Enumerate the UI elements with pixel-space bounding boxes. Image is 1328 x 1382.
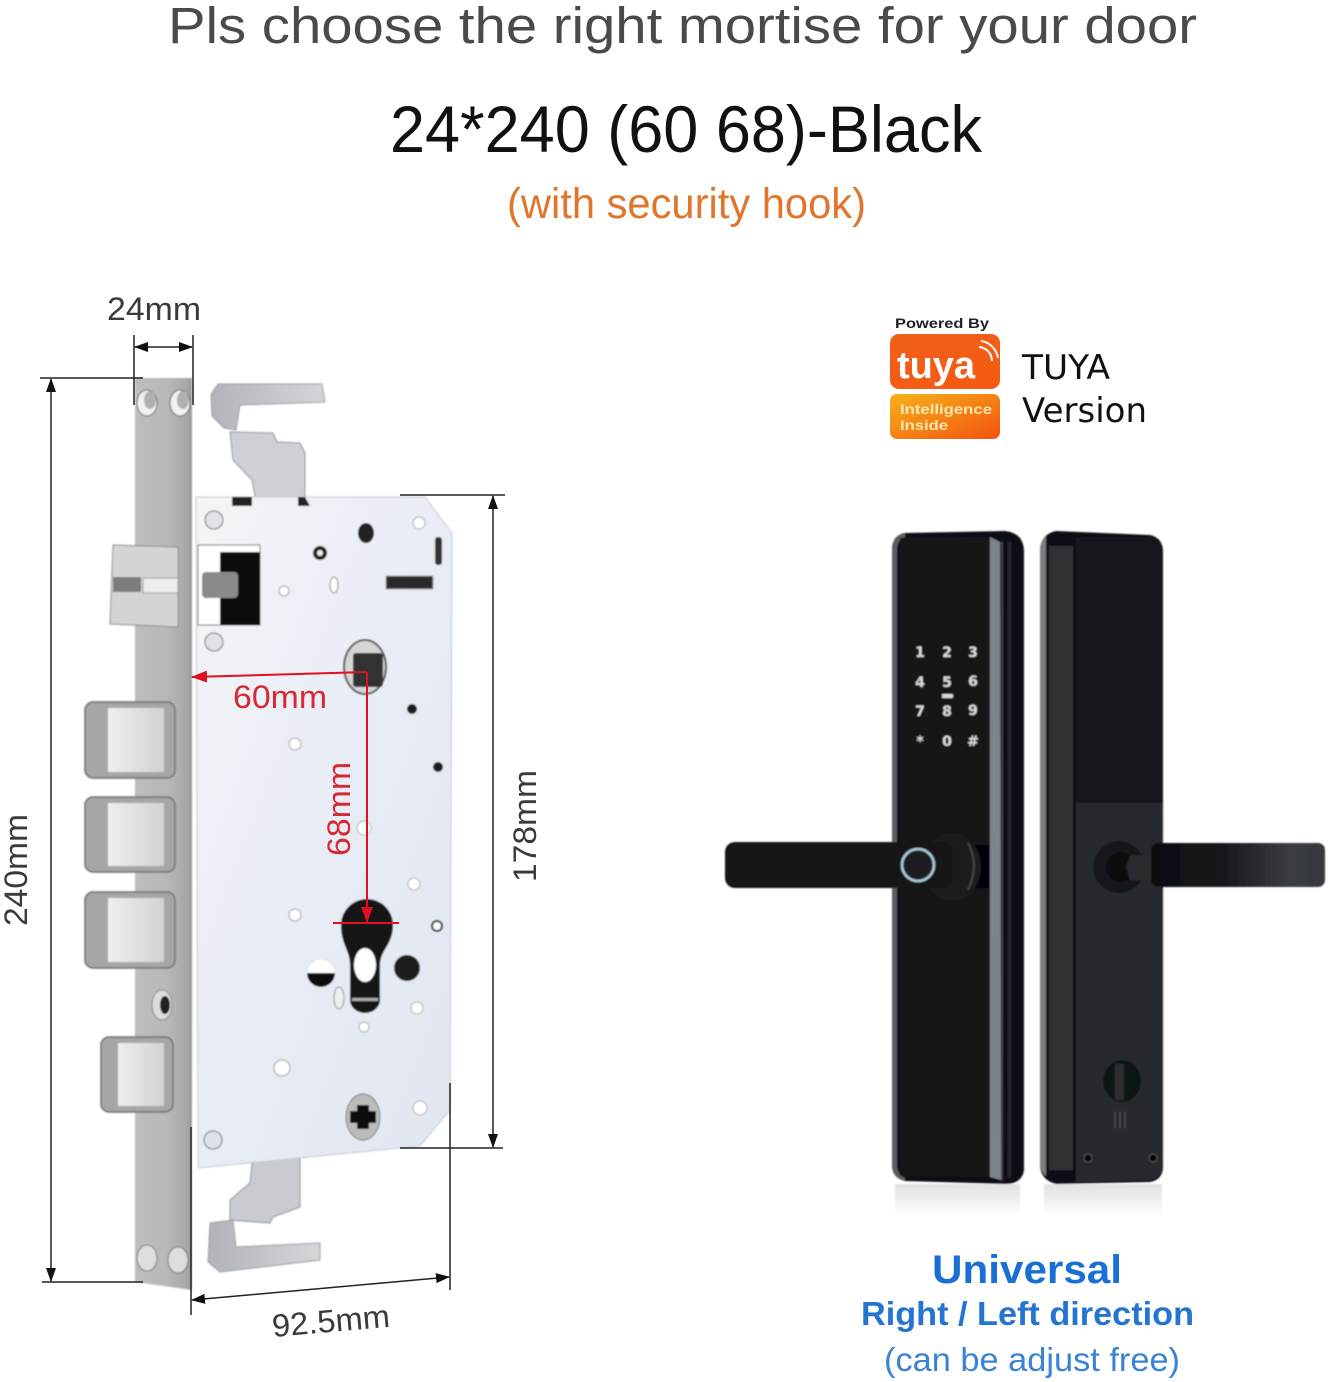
dimension: 68mm: 68mm — [321, 762, 357, 856]
model heading: 24*240 (60 68)-Black — [390, 92, 983, 166]
keypad: 2 — [942, 645, 952, 661]
spindle hole — [344, 640, 386, 694]
back handle — [1151, 843, 1325, 887]
keypad: 6 — [968, 674, 978, 690]
dimension: 60mm — [192, 672, 367, 715]
caption line 3: (can be adjust free) — [884, 1341, 1180, 1378]
caption line 1: Universal — [932, 1248, 1122, 1292]
mortise case body — [196, 497, 452, 1168]
dimension: 60mm: 60mm — [233, 679, 327, 715]
powered by label: Powered By — [895, 315, 989, 331]
fingerprint sensor — [902, 849, 934, 881]
dead bolts — [85, 702, 175, 1112]
top security hook — [211, 384, 325, 507]
keypad: 8 — [942, 704, 952, 720]
intelligence inside tag — [890, 394, 1000, 439]
tuya version label — [1021, 348, 1147, 431]
keypad: 7 — [915, 704, 925, 720]
keypad: * — [916, 734, 924, 750]
keypad: 3 — [968, 645, 978, 661]
dimension: 178mm: 178mm — [507, 770, 543, 882]
subheading: security hook: (with security hook) — [507, 180, 866, 228]
bottom key hole — [346, 1094, 380, 1140]
keypad: 1 — [915, 645, 925, 661]
dimension: 92.5mm: 92.5mm — [270, 1298, 391, 1344]
thumb turn — [1103, 1060, 1141, 1102]
intelligence inside tag: Inside — [900, 417, 948, 433]
back knob — [1093, 841, 1153, 893]
keypad — [915, 645, 979, 750]
mortise lock diagram — [85, 378, 452, 1290]
vent slots and screws — [1084, 1112, 1157, 1162]
latch bolt — [110, 545, 178, 627]
tuya logo: tuya — [897, 345, 976, 387]
tuya badge — [890, 315, 1000, 439]
front knob — [923, 833, 990, 901]
faceplate — [135, 378, 192, 1290]
keypad: # — [967, 734, 979, 750]
dimension: 24mm — [107, 291, 201, 405]
reflection — [895, 1184, 1020, 1218]
universal caption — [861, 1248, 1194, 1378]
caption line 2: Right / Left direction — [861, 1295, 1194, 1332]
dimension: 178mm — [400, 495, 543, 1148]
dimension: 240mm — [0, 378, 143, 1282]
latch window — [198, 545, 260, 625]
keypad: 4 — [915, 675, 925, 691]
tuya version label: Version — [1022, 391, 1147, 431]
euro cylinder cutout — [307, 899, 420, 1013]
back lock panel — [1040, 531, 1325, 1218]
keypad: 9 — [968, 703, 978, 719]
intelligence inside tag: Intelligence — [900, 401, 992, 417]
keypad: 0 — [942, 734, 952, 750]
front lock panel — [725, 531, 1024, 1218]
dimension: 24mm: 24mm — [107, 291, 201, 327]
reflection — [1044, 1184, 1162, 1218]
tuya version label: TUYA — [1021, 348, 1110, 388]
bottom security hook — [208, 1148, 320, 1272]
front handle — [725, 842, 953, 888]
back panel body — [1040, 531, 1163, 1184]
dimension: 92.5mm — [191, 1083, 450, 1344]
keypad: 5 — [942, 675, 952, 691]
front panel body — [892, 531, 1024, 1184]
